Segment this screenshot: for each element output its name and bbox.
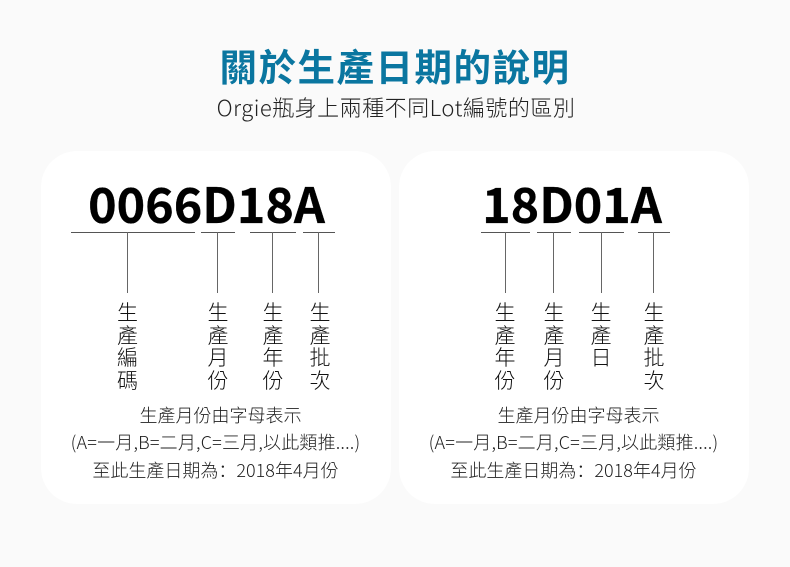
label: 生產年份: 產 [262, 320, 284, 350]
note: right explanation: 生產月份由字母表示 [498, 402, 660, 428]
label: 生產月份 right [544, 297, 564, 395]
label: 生產編碼: 編 [117, 342, 138, 372]
label: 生產日: 日 [590, 342, 612, 372]
panel: left lot code [41, 151, 391, 504]
label: 生產月份 right: 生 [544, 297, 564, 327]
note: left explanation [71, 402, 360, 482]
label: 生產年份: 年 [262, 342, 284, 372]
label: 生產批次 right [644, 297, 664, 395]
label: 生產月份 right: 月 [544, 342, 564, 372]
note: left explanation: 生產月份由字母表示 [140, 402, 302, 428]
label: 生產批次 right: 次 [644, 365, 664, 395]
label: 生產編碼 [117, 297, 138, 395]
label: 生產月份: 生 [208, 297, 228, 327]
label: 生產月份 [208, 297, 228, 395]
panel: right lot code [399, 151, 749, 504]
label: 生產批次 [310, 297, 330, 395]
label: 生產年份 right: 產 [494, 320, 516, 350]
label: 生產月份: 產 [208, 320, 228, 350]
lot code: 18D01A: 18D01A [482, 167, 662, 237]
label: 生產批次 right: 產 [644, 320, 664, 350]
label: 生產年份: 生 [262, 297, 284, 327]
note: left explanation: (A=一月,B=二月,C=三月,以此類推....) [71, 429, 360, 455]
label: 生產月份: 份 [208, 365, 228, 395]
note: left explanation: 至此生產日期為：2018年4月份 [92, 456, 339, 482]
label: 生產日: 生 [590, 297, 612, 327]
title: 關於生產日期的說明 [220, 37, 570, 92]
label: 生產日 [590, 297, 612, 372]
label: 生產月份: 月 [208, 342, 228, 372]
note: right explanation: 至此生產日期為：2018年4月份 [450, 456, 697, 482]
label: 生產批次: 生 [310, 297, 330, 327]
label: 生產月份 right: 份 [544, 365, 564, 395]
label: 生產年份 right: 生 [494, 297, 516, 327]
note: right explanation [429, 402, 718, 482]
label: 生產年份 right: 年 [494, 342, 516, 372]
subtitle: Orgie瓶身上兩種不同Lot編號的區別 [217, 91, 575, 123]
note: right explanation: (A=一月,B=二月,C=三月,以此類推....) [429, 429, 718, 455]
label: 生產批次 right: 生 [644, 297, 664, 327]
label: 生產年份 [262, 297, 284, 395]
label: 生產編碼: 產 [117, 320, 138, 350]
label: 生產日: 產 [590, 320, 612, 350]
label: 生產年份: 份 [262, 365, 284, 395]
label: 生產批次: 批 [310, 342, 330, 372]
label: 生產年份 right [494, 297, 516, 395]
label: 生產編碼: 碼 [117, 365, 138, 395]
label: 生產批次: 產 [310, 320, 330, 350]
label: 生產批次 right: 批 [644, 342, 664, 372]
label: 生產批次: 次 [310, 365, 330, 395]
lot code: 0066D18A: 0066D18A [88, 167, 325, 237]
label: 生產月份 right: 產 [544, 320, 564, 350]
label: 生產編碼: 生 [117, 297, 138, 327]
label: 生產年份 right: 份 [494, 365, 516, 395]
